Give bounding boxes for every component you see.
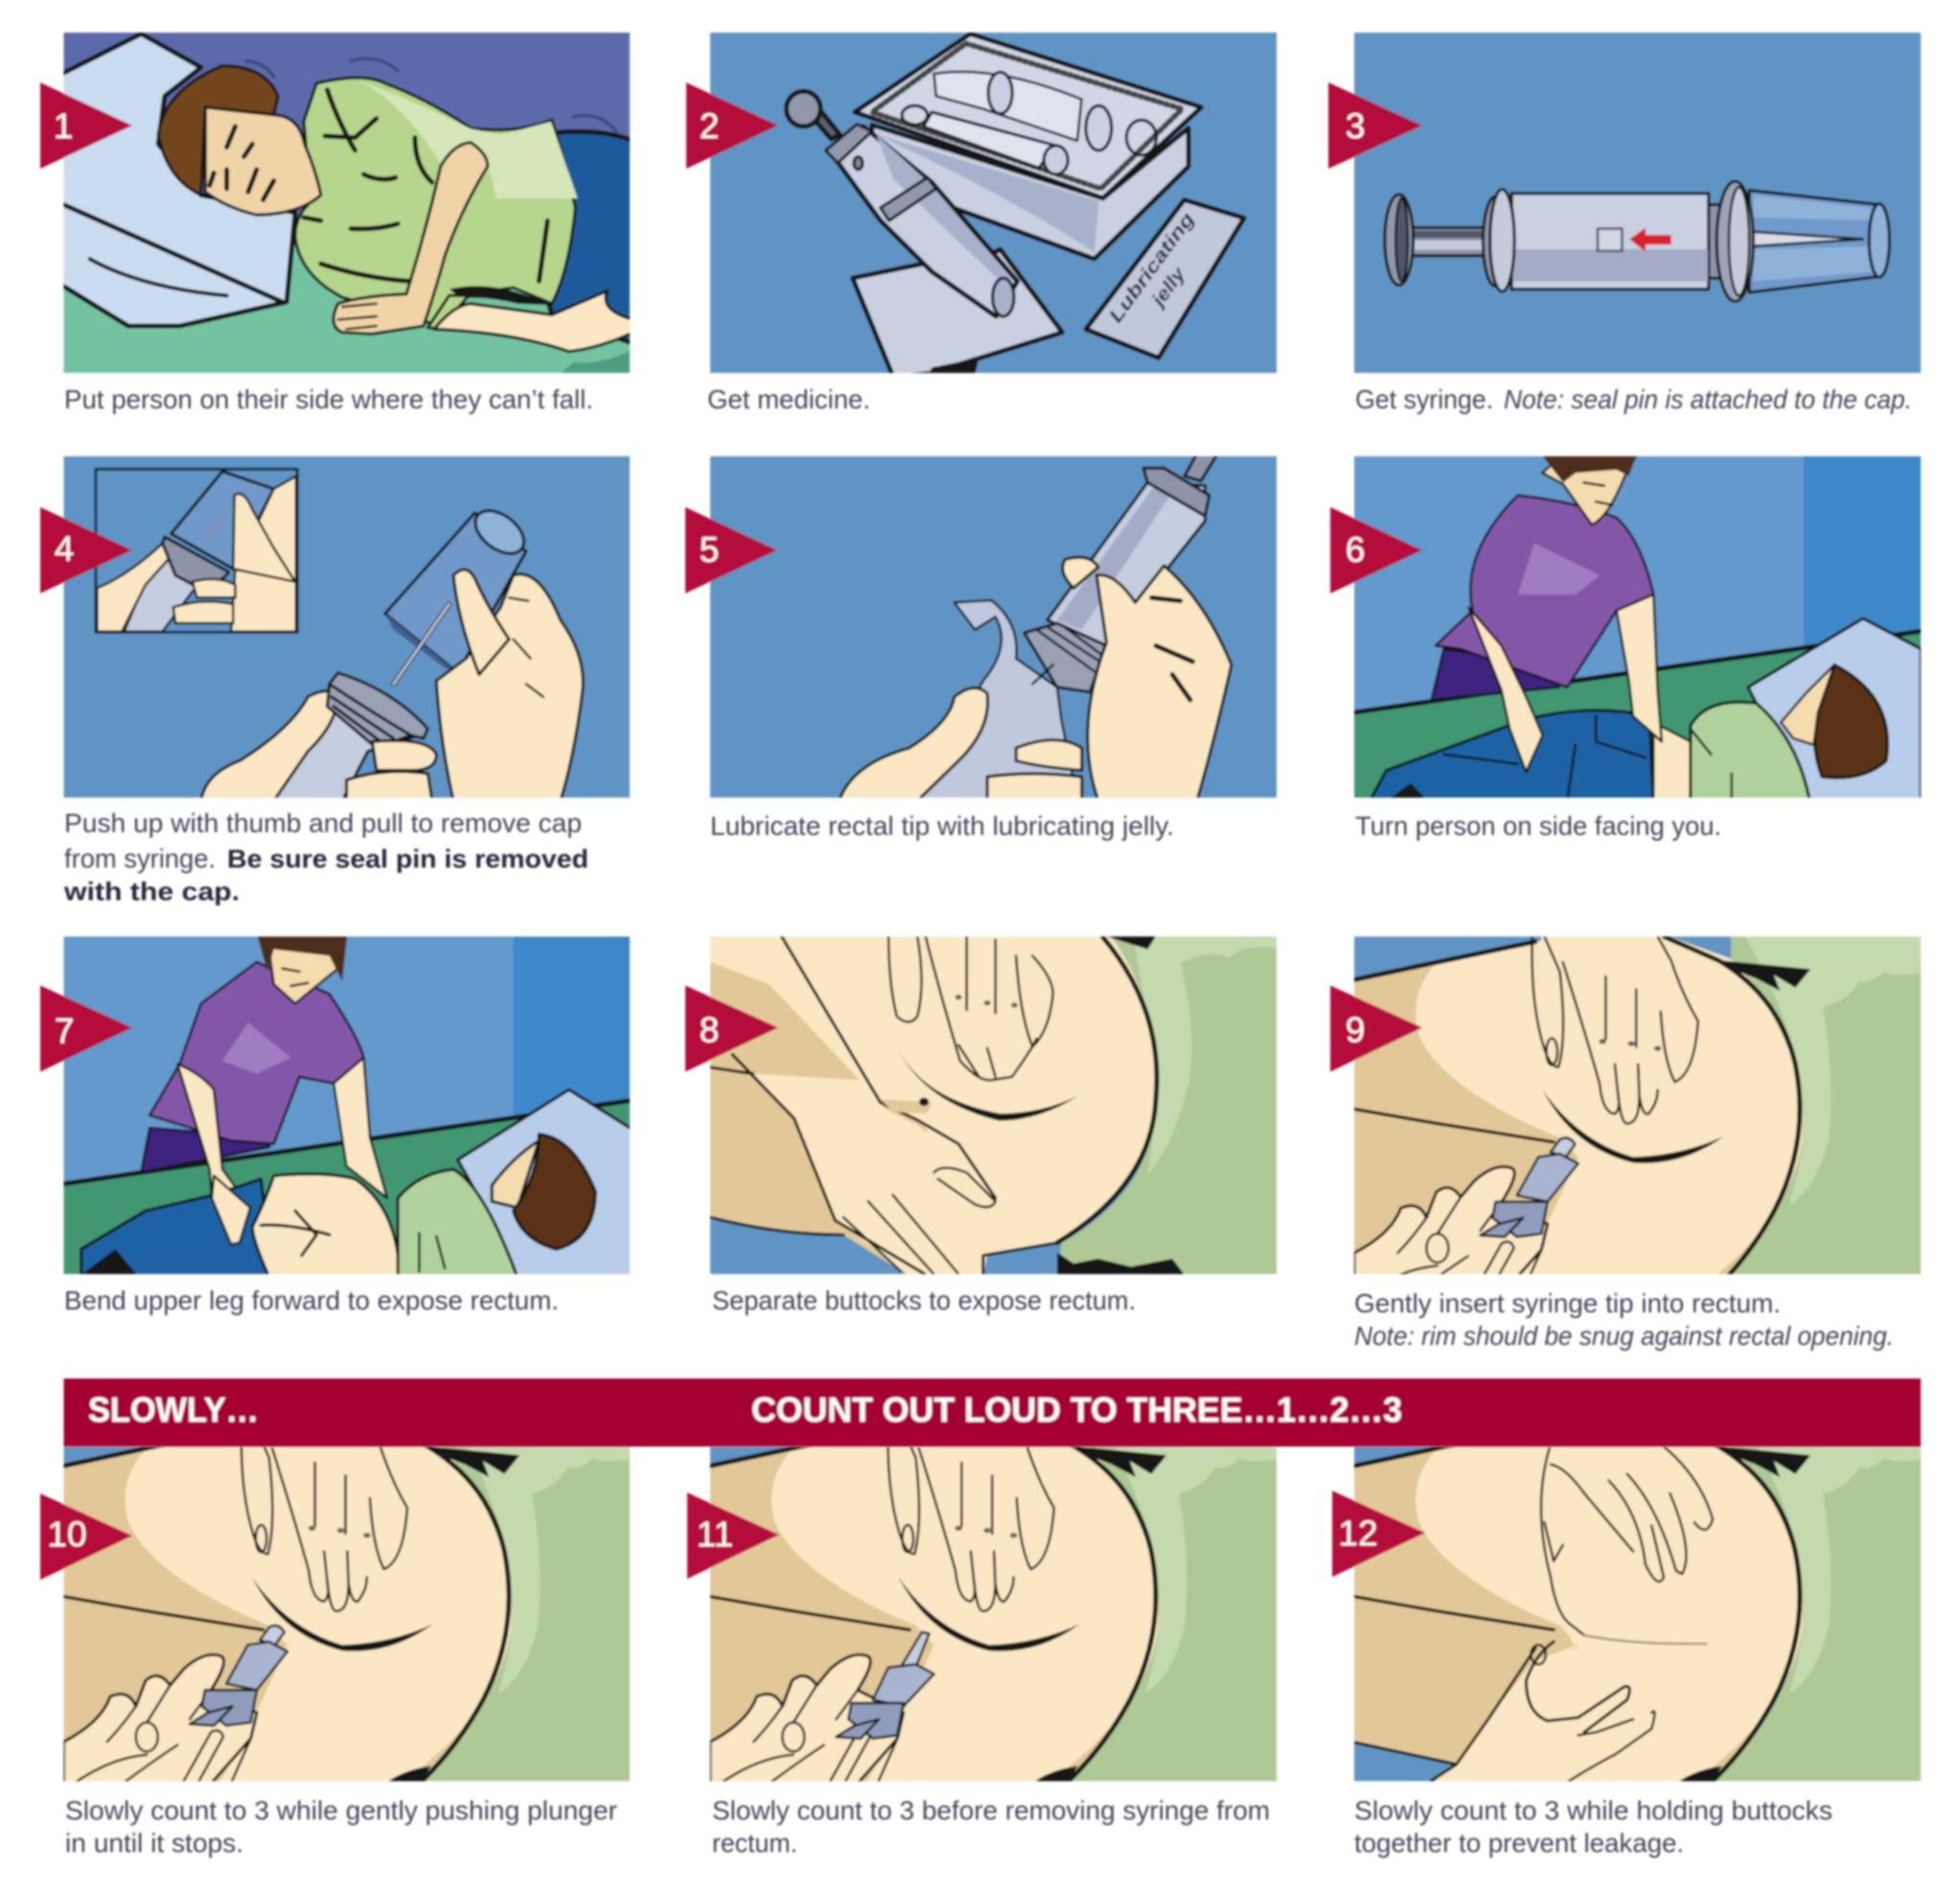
caption: step 5: Lubricate rectal tip with lubricating jelly. <box>710 811 1174 841</box>
inset view <box>96 469 297 633</box>
caregiver <box>1432 453 1653 700</box>
caption: step 4 <box>63 808 588 906</box>
badge: step number 1 <box>40 82 132 169</box>
holding hand <box>1354 1167 1548 1298</box>
caption: step 9: Note: rim should be snug against rectal opening. <box>1354 1321 1894 1351</box>
badge: step number 9 <box>1330 985 1422 1072</box>
badge: step number 5 <box>685 507 777 593</box>
caption: step 12 <box>1354 1796 1833 1858</box>
label on packet: jelly <box>1146 264 1190 313</box>
left hand holding syringe <box>201 673 436 800</box>
panel: step 10 <box>40 1403 642 1858</box>
badge: step number 12: 12 <box>1338 1514 1378 1553</box>
caregiver arms <box>1468 594 1662 772</box>
patient <box>81 1134 595 1278</box>
hand separating buttocks <box>843 1168 996 1274</box>
banner: slowly count out loud <box>63 1379 1921 1447</box>
illustration: bending upper leg forward <box>61 935 632 1276</box>
panel: step 5 <box>685 441 1312 841</box>
blue bed corner <box>1351 1742 1457 1784</box>
illustration: inserting syringe tip <box>1351 935 1923 1276</box>
caption: step 4: Be sure seal pin is removed <box>227 845 588 873</box>
panel: step 11 <box>687 1403 1289 1858</box>
hand resting on buttock <box>888 937 1053 1080</box>
body outlines <box>710 937 1185 1275</box>
patient <box>1370 665 1887 800</box>
badge: step number 1: 1 <box>54 106 73 146</box>
panel: step 1 <box>40 16 663 414</box>
caption: step 8: Separate buttocks to expose rectum. <box>712 1286 1136 1315</box>
caption: step 11: rectum. <box>712 1828 797 1858</box>
caption: step 4: from syringe. <box>64 844 216 873</box>
badge: step number 3 <box>1328 82 1422 169</box>
syringe barrel <box>1025 453 1217 692</box>
caption: step 11 <box>712 1796 1270 1858</box>
illustration: removing syringe <box>707 1446 1279 1783</box>
syringe <box>190 1626 288 1726</box>
caption: step 10: Slowly count to 3 while gently pushing plunger <box>65 1796 617 1825</box>
badge: step number 10 <box>40 1494 132 1580</box>
badge: step number 11 <box>687 1493 779 1579</box>
label on packet <box>1105 209 1219 341</box>
illustration: medicine box, syringe and lubricating jelly <box>707 31 1279 375</box>
caption: step 7: Bend upper leg forward to expose rectum. <box>64 1286 559 1315</box>
caption: step 3: Get syringe. <box>1355 384 1493 414</box>
panel: step 9 <box>1330 917 1933 1351</box>
icon: red arrow <box>1629 227 1672 252</box>
syringe <box>836 1633 934 1739</box>
badge: step number 4: 4 <box>55 529 74 568</box>
panel: step 8 <box>685 920 1312 1315</box>
badge: step number 7 <box>40 985 132 1072</box>
holding hand <box>63 1655 257 1787</box>
right hand holding cap <box>385 504 583 800</box>
caption: step 1: Put person on their side where they can’t fall. <box>64 384 593 414</box>
panel: step 12 <box>1332 1403 1933 1858</box>
panel: step 4 <box>40 441 663 906</box>
illustration: lubricating the rectal tip <box>708 454 1279 799</box>
badge: step number 4 <box>40 507 132 593</box>
skin below crease <box>1431 1629 1633 1784</box>
caption: step 3: Note: seal pin is attached to the cap. <box>1504 384 1912 414</box>
label on packet: Lubricating <box>1105 209 1199 327</box>
jelly packet <box>1086 200 1244 358</box>
caption: step 11: Slowly count to 3 before removing syringe from <box>712 1796 1270 1825</box>
badge: step number 9: 9 <box>1346 1010 1365 1050</box>
upper hand <box>1544 1447 1713 1582</box>
caption: step 9 <box>1354 1288 1894 1351</box>
caption: step 2: Get medicine. <box>707 384 870 414</box>
lower hand <box>1431 1642 1654 1781</box>
banner text: slowly: SLOWLY… <box>88 1390 259 1429</box>
badge: step number 8: 8 <box>700 1010 719 1050</box>
badge: step number 8 <box>685 985 778 1072</box>
illustration: syringe with cap <box>1352 31 1923 375</box>
marker square <box>1598 228 1622 251</box>
panel: step 3 <box>1328 16 1932 414</box>
illustration: caregiver turning person on side <box>1352 454 1923 799</box>
illustration: pushing the plunger <box>61 1446 631 1783</box>
badge: step number 7: 7 <box>55 1011 74 1051</box>
pillow <box>1748 618 1921 800</box>
badge: step number 2 <box>686 82 778 169</box>
panel: step 2 <box>686 16 1291 414</box>
badge: step number 2: 2 <box>700 106 719 146</box>
illustration: holding buttocks together <box>1351 1446 1923 1783</box>
illustration: removing the cap from the syringe <box>61 454 632 799</box>
panel: step 7 <box>40 920 663 1315</box>
badge: step number 3: 3 <box>1346 106 1365 146</box>
caption: step 12: Slowly count to 3 while holding buttocks <box>1354 1796 1833 1825</box>
illustration: person lying on their side <box>61 31 632 375</box>
caption: step 9: Gently insert syringe tip into rectum. <box>1354 1288 1781 1318</box>
hands <box>840 557 1232 800</box>
vertical crease <box>1541 1448 1584 1635</box>
caption: step 10: in until it stops. <box>65 1828 243 1858</box>
jelly foil packet <box>917 600 1077 800</box>
badge: step number 10: 10 <box>47 1515 87 1554</box>
caption: step 12: together to prevent leakage. <box>1354 1828 1684 1858</box>
caption: step 6: Turn person on side facing you. <box>1355 811 1721 841</box>
caregiver <box>141 934 387 1244</box>
syringe <box>1480 1138 1579 1237</box>
panel: step 6 <box>1328 441 1953 841</box>
badge: step number 6: 6 <box>1346 530 1365 569</box>
pillow <box>458 1090 650 1304</box>
caption: step 4: with the cap. <box>63 877 240 906</box>
holding hand <box>710 1655 904 1787</box>
badge: step number 5: 5 <box>700 530 719 569</box>
buttock crease <box>899 1052 1077 1121</box>
badge: step number 12 <box>1332 1491 1425 1577</box>
badge: step number 11: 11 <box>697 1515 733 1554</box>
illustration: separating buttocks <box>707 935 1279 1276</box>
caption: step 10 <box>65 1796 617 1858</box>
syringe <box>786 91 1017 316</box>
banner text: count: COUNT OUT LOUD TO THREE…1…2…3 <box>751 1390 1402 1429</box>
badge: step number 6 <box>1330 507 1422 593</box>
caption: step 4: Push up with thumb and pull to remove cap <box>64 808 582 838</box>
